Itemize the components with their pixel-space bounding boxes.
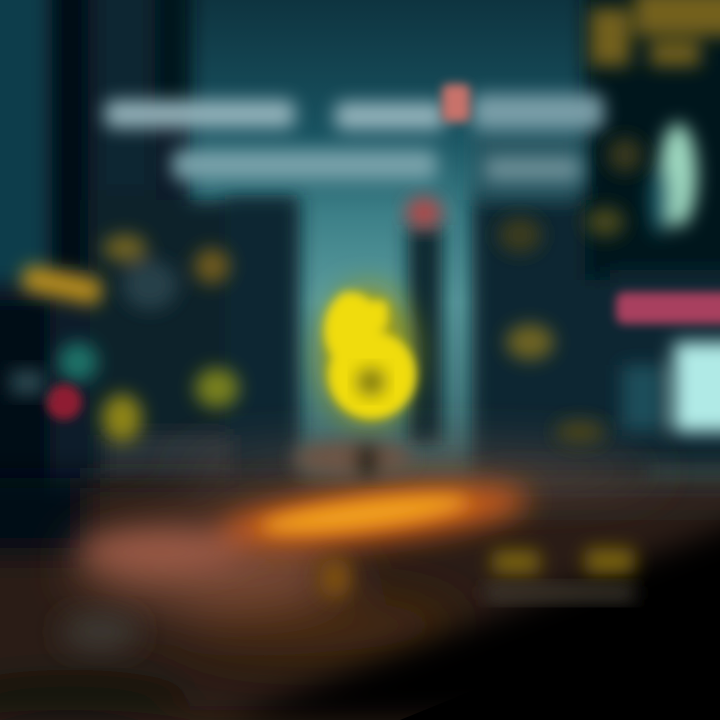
yellow window lights bbox=[102, 137, 643, 444]
right buildings bbox=[408, 0, 720, 485]
road glow haze bbox=[75, 454, 660, 651]
red light left bbox=[46, 384, 82, 420]
figure body bbox=[324, 292, 416, 419]
grey caption blob bottom right bbox=[485, 585, 635, 601]
pale blue panel right bbox=[622, 342, 720, 432]
grey caption blob bottom left bbox=[60, 614, 140, 650]
pale sign left bbox=[10, 370, 45, 395]
yellow sign top right bbox=[590, 0, 720, 66]
black road corner bbox=[225, 510, 720, 720]
figure legs bbox=[292, 442, 412, 475]
central yellow figure bbox=[292, 287, 416, 475]
ground bbox=[0, 470, 720, 720]
figure glow bbox=[322, 287, 414, 423]
pale lit window right bbox=[650, 123, 697, 235]
figure centre mark bbox=[358, 369, 384, 395]
yellow bottom text blobs bbox=[319, 548, 635, 598]
teal sign left bbox=[58, 342, 98, 382]
orange light streak bbox=[80, 473, 532, 570]
left buildings bbox=[0, 0, 300, 530]
ground base bbox=[0, 530, 720, 720]
pink neon sign right bbox=[616, 292, 720, 324]
black corner fill bbox=[400, 590, 720, 720]
orange sign left bbox=[20, 264, 104, 306]
streak core bbox=[259, 487, 471, 541]
red tower light bbox=[406, 197, 442, 229]
title band bbox=[105, 94, 604, 181]
red accent in title bbox=[442, 84, 470, 122]
